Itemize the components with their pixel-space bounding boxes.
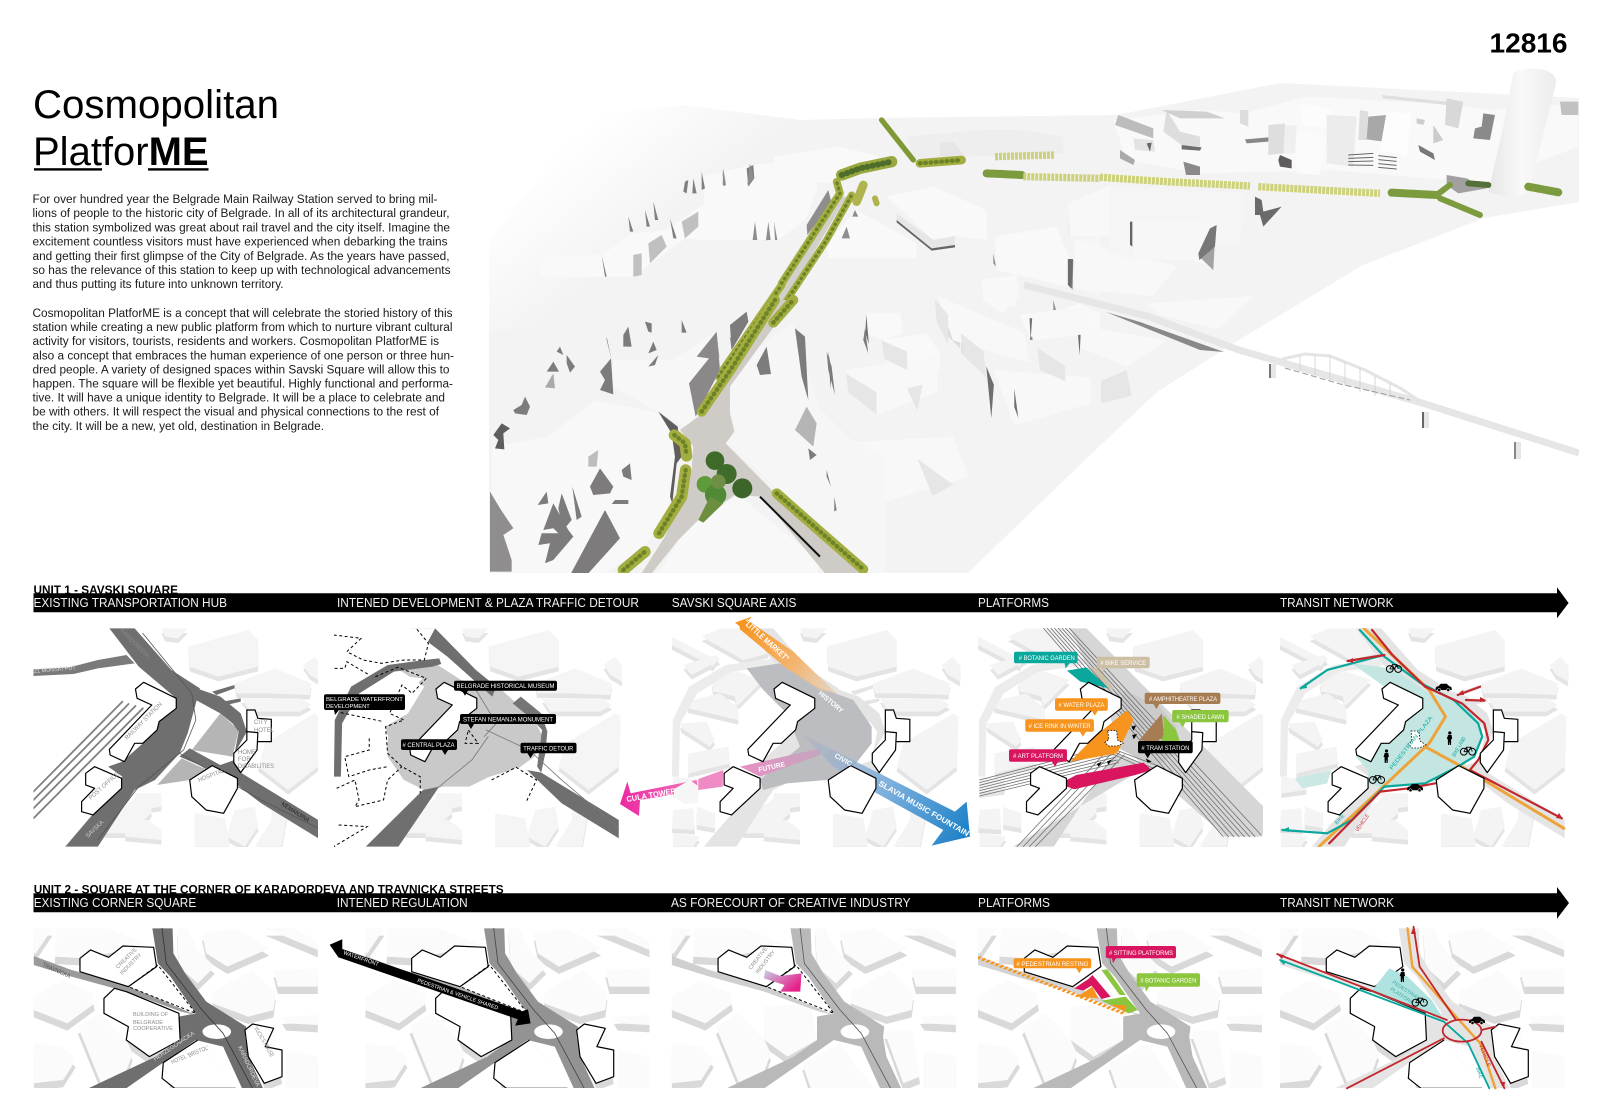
callout: sitting platforms: # SITTING PLATFORMS: [1109, 950, 1173, 957]
platforms: [1074, 978, 1092, 991]
arrow: pedestrian and vehicle shared axis: [330, 940, 530, 1025]
plaza fill: [157, 713, 239, 785]
panel: savski square axis: [620, 617, 971, 851]
callout: central plaza: # CENTRAL PLAZA: [402, 742, 455, 749]
street and building labels: SAVSKA: [85, 820, 105, 839]
text block: intro paragraph: and thus putting its future into unknown territory.: [32, 279, 284, 291]
panel: transit network corner square: [1277, 926, 1564, 1096]
central blocks and avenue: [700, 120, 1100, 380]
section heading: unit 2: UNIT 2 - SQUARE AT THE CORNER OF KARADORDEVA AND TRAVNICKA STREETS: [34, 882, 504, 896]
route labels: PEDESTRIAN: [1391, 980, 1421, 1002]
route labels: VEHICLE: [1477, 1044, 1492, 1069]
callout: amphitheatre plaza: # AMPHITHEATRE PLAZA: [1149, 696, 1218, 703]
callout: stefan nemanja monument: STEFAN NEMANJA MONUMENT: [463, 716, 553, 724]
title: PlatforME: [33, 130, 209, 174]
street and building labels: HOTEL 'BRISTOL': [171, 1045, 210, 1066]
route labels: [1334, 715, 1468, 833]
teal path: [1282, 630, 1482, 833]
icon: bicycle east: [1460, 747, 1476, 755]
callout: amphitheatre plaza: [1145, 693, 1220, 709]
route arrowheads: [1277, 926, 1505, 1089]
axis labels: [626, 617, 971, 838]
axis labels: SLAVIA MUSIC FOUNTAIN: [877, 779, 971, 838]
text block: concept paragraph: station while creating a new public platform from which to nurture vibrant cultural: [32, 322, 452, 334]
street and building labels: FOR: [238, 757, 251, 763]
panel: existing transportation hub: [33, 628, 322, 851]
panel: transit network: [1280, 628, 1569, 851]
creative industry label: INDUSTRY: [755, 949, 777, 975]
street and building labels: HOME: [238, 750, 256, 756]
arrow: slavia music fountain: [803, 735, 970, 846]
title: [33, 83, 279, 174]
arrow bar: unit 2: INTENED REGULATION: [337, 895, 468, 910]
callout: belgrade waterfront development: BELGRADE WATERFRONT: [326, 697, 403, 703]
panel: forecourt of creative industry: [672, 928, 956, 1096]
callout: central plaza: [401, 739, 457, 755]
street and building labels: DISABILITIES: [238, 764, 274, 770]
callout: tram station: # TRAM STATION: [1141, 745, 1189, 752]
axis labels: FUTURE: [758, 761, 786, 774]
route arrowheads: [1282, 658, 1563, 832]
icon: car north: [1436, 684, 1452, 692]
orange route: [1408, 928, 1495, 1088]
axis labels: CULA TOWER: [626, 786, 677, 804]
arrow bar: unit 2: [34, 887, 1569, 919]
street and building labels: KARADORDEVA: [119, 628, 150, 659]
street and building labels: CREATIVE: [115, 947, 139, 970]
pedestrian dotted strip: [978, 957, 1126, 1014]
small white block over the pink arrow: [674, 780, 698, 804]
callout: water plaza: [1055, 698, 1108, 716]
project number: 12816: [1490, 28, 1568, 58]
callout: art platform: # ART PLATFORM: [1013, 753, 1063, 760]
teal route: [1280, 960, 1489, 1088]
street and building labels: RAILWAY STATION: [124, 702, 164, 741]
callout: art platform: [1009, 749, 1067, 767]
icon: car south: [1407, 784, 1423, 792]
street and building labels: INDUSTRY: [119, 952, 143, 976]
arrow bar: unit 2: PLATFORMS: [978, 895, 1050, 910]
callout: traffic detour: TRAFFIC DETOUR: [523, 746, 574, 752]
callout: tram station: [1138, 741, 1193, 758]
plaza with trees and tram: [490, 300, 885, 573]
callout: botanic garden corner: [1137, 973, 1200, 992]
arrow bar: unit 1: [34, 587, 1569, 618]
callout: shaded lawn: # SHADED LAWN: [1176, 714, 1224, 721]
red routes: [1277, 927, 1504, 1088]
text block: intro paragraph: [32, 194, 451, 291]
street and building labels: HERZEGOVACKA: [153, 1031, 196, 1063]
arrow bar: unit 2: TRANSIT NETWORK: [1280, 895, 1394, 910]
orange path: [1319, 628, 1564, 847]
arrow bar: unit 1: TRANSIT NETWORK: [1280, 595, 1394, 610]
callout: water plaza: # WATER PLAZA: [1058, 702, 1105, 709]
text block: concept paragraph: the city. It will be a new, yet old, destination in Belgrade.: [32, 421, 324, 433]
panel: platforms corner square: [978, 928, 1262, 1096]
callout: ice rink in winter: [1025, 719, 1094, 737]
arrow bar: unit 1: PLATFORMS: [978, 595, 1049, 610]
street and building labels: CITY: [254, 720, 268, 726]
icon: pedestrian east: [1447, 731, 1452, 745]
icon: bicycle south: [1369, 776, 1385, 783]
pedestrian plaza: [1352, 663, 1482, 788]
pedestrian platform: [1371, 968, 1444, 1020]
street and building labels: HOTEL: [254, 728, 275, 734]
callout: pedestrian resting: [1014, 958, 1091, 973]
route labels: PLATFORM: [1389, 987, 1415, 1006]
icon: pedestrian west: [1384, 749, 1389, 763]
text block: concept paragraph: dred people. A variety of designed spaces within Savski Square will allow this to: [32, 364, 449, 376]
street and building labels: [41, 947, 274, 1088]
dashed development outlines: [334, 628, 537, 847]
icon: pedestrian: [1400, 968, 1405, 982]
street and building labels: VUCIC'S HOUSE: [252, 1026, 274, 1058]
callout: stefan nemanja monument: [460, 714, 556, 729]
route labels: BIKE LAND: [1452, 736, 1468, 758]
title: Cosmopolitan: [33, 83, 279, 127]
text block: intro paragraph: this station symbolized was great about rail travel and the city itself. Imagine the: [32, 222, 450, 234]
arrow bar: unit 1: SAVSKI SQUARE AXIS: [672, 595, 797, 610]
axis labels: "LITTLE MARKET": [742, 617, 791, 663]
section heading: unit 1: UNIT 1 - SAVSKI SQUARE: [34, 583, 178, 597]
avenue: [778, 196, 846, 300]
panel: intended regulation: [330, 928, 649, 1096]
white development plots: [386, 676, 423, 746]
text block: concept paragraph: Cosmopolitan PlatforME is a concept that will celebrate the storied history of this: [32, 308, 453, 320]
platform shapes: [1067, 667, 1180, 789]
callout: shaded lawn: [1172, 710, 1229, 727]
street and building labels: KARADORDEVA: [236, 1045, 260, 1088]
callout: belgrade historical museum: [454, 681, 557, 696]
callout: botanic garden: # BOTANIC GARDEN: [1019, 655, 1075, 662]
text block: concept paragraph: be with others. It will respect the visual and physical connections to the rest of: [32, 407, 440, 419]
arrow: forecourt: [764, 970, 802, 992]
railway bridge: [1024, 285, 1579, 459]
callout: traffic detour: [520, 743, 576, 758]
callout: belgrade waterfront development: [324, 694, 405, 715]
street and building labels: TRAVNICKA: [41, 962, 71, 980]
text block: intro paragraph: lions of people to the historic city of Belgrade. In all of its architectural grandeur,: [32, 208, 449, 220]
route labels: PEDESTRIAN PLAZA: [1389, 715, 1434, 771]
rail tracks: [33, 702, 143, 818]
callout: botanic garden: [1014, 652, 1078, 668]
callout: belgrade waterfront development: DEVELOPMENT: [326, 704, 370, 710]
street and building labels: [34, 628, 310, 839]
hero aerial view of the city: [489, 68, 1579, 573]
icon: car: [1469, 1017, 1485, 1025]
red path: [1329, 630, 1562, 843]
plaza surface: [642, 300, 867, 573]
downtown towers: [1100, 68, 1578, 260]
axis labels: CIVIC: [833, 753, 853, 768]
text block: concept paragraph: also a concept that embraces the human experience of one person or three hun-: [32, 350, 454, 362]
panel: intended development and plaza detour: [324, 628, 623, 851]
street and building labels: NEMANJINA: [280, 802, 310, 824]
monument marker: [1408, 731, 1426, 748]
route labels: BIKE: [1474, 1067, 1484, 1080]
route labels: VEHICLE: [1355, 813, 1371, 833]
text block: concept paragraph: happen. The square will be flexible yet beautiful. Highly functional and performa-: [32, 378, 453, 390]
callout: bike service: [1097, 657, 1150, 673]
arrow bar: unit 2: EXISTING CORNER SQUARE: [34, 895, 196, 910]
callout: pedestrian resting: # PEDESTRIAN RESTING: [1016, 961, 1089, 968]
icon: bicycle north: [1386, 664, 1402, 672]
callout: sitting platforms: [1106, 946, 1176, 963]
street and building labels: POST OFFICE: [88, 772, 121, 801]
icon: bicycle: [1412, 998, 1427, 1006]
arrow: cula tower: [620, 748, 820, 816]
street and building labels: BUILDING OF: [133, 1012, 169, 1018]
axis labels: HISTORY: [817, 690, 844, 715]
street and building labels: HOSPITAL: [198, 768, 226, 784]
panel: existing corner square: [34, 928, 318, 1096]
land mass: [489, 83, 1579, 573]
route labels: [1389, 980, 1492, 1080]
upper left district: [602, 165, 768, 277]
callout: bike service: # BIKE SERVICE: [1100, 660, 1146, 667]
arrow: little market: [735, 617, 837, 693]
callout: belgrade historical museum: BELGRADE HISTORICAL MUSEUM: [456, 683, 554, 690]
arrow bar: unit 2: AS FORECOURT OF CREATIVE INDUSTRY: [671, 895, 911, 910]
text block: concept paragraph: [32, 308, 454, 433]
callout: botanic garden corner: # BOTANIC GARDEN: [1140, 978, 1196, 984]
text block: concept paragraph: activity for visitors, tourists, residents and workers. Cosmopolitan PlatforME is: [32, 336, 439, 348]
text block: concept paragraph: tive. It will have a unique identity to Belgrade. It will be a place to celebrate and: [32, 393, 445, 405]
street and building labels: BELGRADE: [133, 1020, 163, 1026]
route labels: BIKE: [1334, 813, 1346, 826]
street and building labels: 21 MUNSKI PUT: [34, 665, 76, 675]
panel: platforms: [978, 628, 1270, 851]
street and building labels: COOPERATIVE: [133, 1026, 173, 1032]
text block: intro paragraph: so has the relevance of this station to keep up with technological advancements: [32, 265, 451, 277]
lower central blocks: [828, 198, 1214, 496]
arrow: pedestrian and vehicle shared axis: PEDESTRIAN & VEHICLE SHARED: [416, 978, 499, 1012]
text block: intro paragraph: For over hundred year the Belgrade Main Railway Station served to bring mil-: [32, 194, 438, 206]
creative industry label: [748, 947, 774, 974]
arrow bar: unit 1: EXISTING TRANSPORTATION HUB: [34, 595, 227, 610]
text block: intro paragraph: excitement countless visitors must have experienced when debarking the trains: [32, 237, 448, 249]
text block: intro paragraph: and getting their first glimpse of the City of Belgrade. As the years have passed,: [32, 251, 449, 263]
creative industry label: CREATIVE: [748, 946, 769, 971]
arrow bar: unit 1: INTENED DEVELOPMENT & PLAZA TRAFFIC DETOUR: [337, 595, 639, 610]
callout: ice rink in winter: # ICE RINK IN WINTER: [1029, 723, 1091, 730]
arrow: pedestrian and vehicle shared axis: WATERFRONT: [342, 950, 380, 968]
